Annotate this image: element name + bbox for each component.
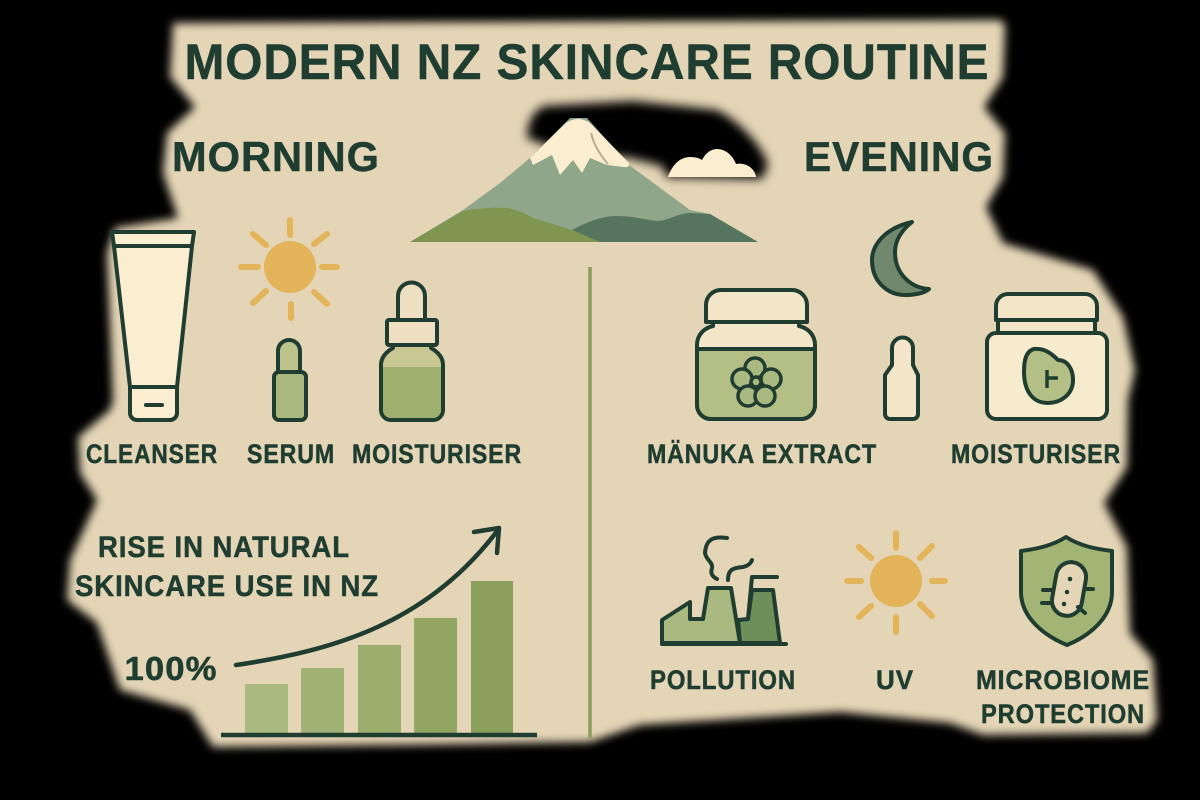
title: MODERN NZ SKINCARE ROUTINE <box>184 34 990 90</box>
icon: morning sun <box>241 220 337 318</box>
chart heading: RISE IN NATURAL <box>98 531 350 564</box>
label: microbiome protection: PROTECTION <box>981 699 1145 729</box>
icon: serum bottle <box>274 340 306 420</box>
icon: cleanser tube <box>112 232 194 420</box>
icon: moisturiser jar <box>987 294 1107 419</box>
label: pollution: POLLUTION <box>650 665 796 695</box>
chart heading <box>75 531 379 603</box>
icon: pollution factory <box>662 538 786 644</box>
heading: morning: MORNING <box>172 133 380 180</box>
divider <box>588 267 592 738</box>
icon: moisturiser dropper bottle <box>381 282 443 420</box>
label: microbiome protection: MICROBIOME <box>976 665 1150 695</box>
label: serum: SERUM <box>247 439 335 469</box>
black patch above mountain <box>527 101 768 179</box>
icon: uv sun <box>847 533 945 632</box>
arrow: growth trend <box>236 528 499 665</box>
label: cleanser: CLEANSER <box>86 439 218 469</box>
icon: ampoule <box>885 338 918 419</box>
label: uv: UV <box>876 665 914 695</box>
bar chart <box>221 581 537 735</box>
icon: cloud <box>668 149 756 177</box>
label: manuka extract: MÄNUKA EXTRACT <box>647 439 877 469</box>
heading: evening: EVENING <box>804 133 994 180</box>
label: microbiome protection <box>976 665 1150 729</box>
icon: microbiome shield <box>1021 537 1112 645</box>
icon: moon <box>872 222 929 295</box>
label: moisturiser evening: MOISTURISER <box>951 439 1121 469</box>
chart heading: SKINCARE USE IN NZ <box>75 570 379 603</box>
stat: 100%: 100% <box>124 650 218 687</box>
icon: manuka jar <box>697 290 815 419</box>
icon: mountain <box>410 118 758 242</box>
label: moisturiser morning: MOISTURISER <box>352 439 522 469</box>
